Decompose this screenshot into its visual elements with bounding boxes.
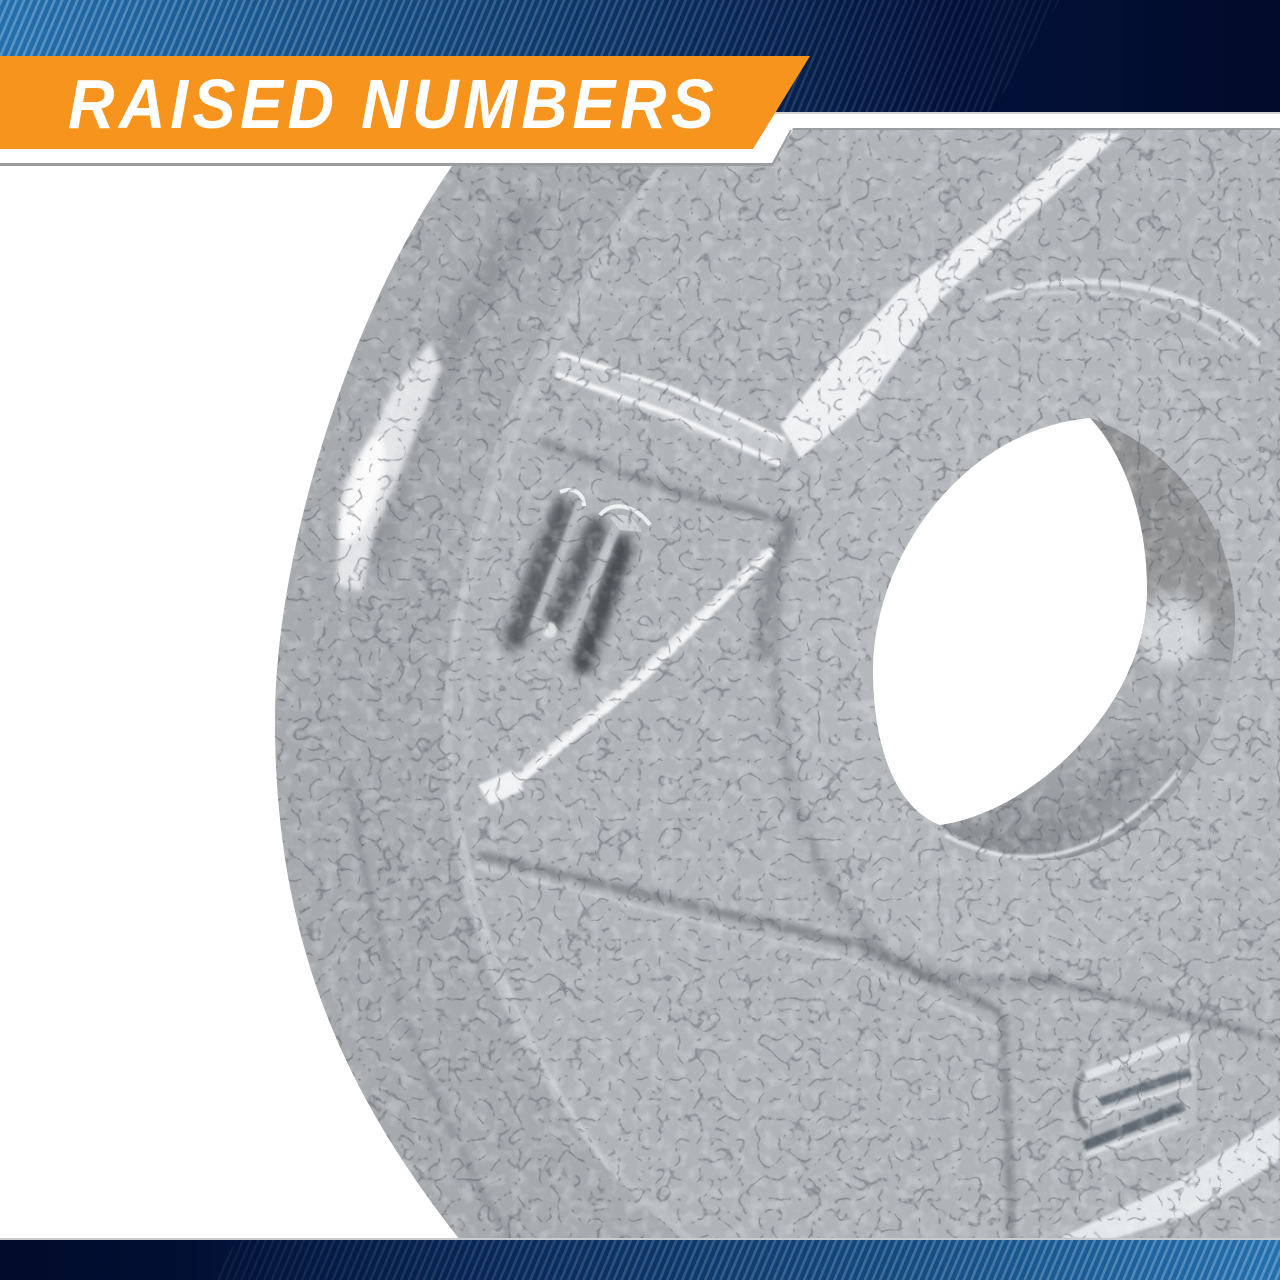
groove one: [514, 508, 563, 640]
white title tab: [0, 114, 1280, 166]
lower dark rib: [478, 855, 1002, 1012]
tab underline: [0, 128, 1280, 166]
dark rib line under panel: [542, 442, 790, 522]
hub top highlight second line: [1030, 292, 1240, 350]
bright top band: [1086, 1036, 1190, 1076]
bright mid line: [1102, 1083, 1192, 1113]
rib bright edge lower: [556, 374, 780, 464]
second land between grooves: [566, 525, 617, 650]
hub top highlight: [985, 282, 1260, 345]
diagonal stripes: [212, 1240, 1280, 1280]
groove three: [582, 545, 624, 664]
highlight digit zero top: [600, 506, 650, 525]
rib bright edge upper: [560, 354, 785, 440]
panel vertical shadow: [761, 525, 790, 660]
inner lip ridge: [447, 170, 690, 1240]
lower vertical rib: [1003, 1012, 1012, 1240]
centre hole: [873, 418, 1147, 825]
lip shadow band: [372, 200, 530, 570]
left rim highlight: [336, 342, 442, 592]
band gradient: [0, 0, 1280, 112]
upper diagonal rib highlight: [780, 133, 1122, 458]
diagonal stripes: [0, 0, 1060, 112]
raised number: 10: [514, 490, 650, 664]
left rim bright patch: [335, 436, 387, 544]
bottom right highlight: [1060, 1115, 1280, 1240]
hub edge shadow: [775, 510, 1060, 982]
weight plate photo: [260, 120, 1280, 1250]
texture: crackle: [260, 120, 1280, 1250]
groove lower: [1084, 1106, 1184, 1146]
groove upper: [1100, 1072, 1190, 1102]
right lower dark rib: [1030, 975, 1280, 1040]
hub shading: [762, 290, 1280, 980]
lower lip groove: [350, 770, 510, 1240]
lower rib light edge: [476, 866, 1000, 1030]
lower diagonal stippled highlight: [512, 552, 770, 786]
outer lip shading: [275, 166, 690, 1240]
orange title banner: [0, 56, 810, 149]
texture: speckle: [260, 120, 1280, 1250]
highlight digit one top: [560, 490, 584, 506]
digit left shadow: [1075, 1072, 1088, 1128]
stipple layer one: [512, 552, 770, 786]
band upper rule: [0, 1238, 1280, 1240]
title: RAISED NUMBERS: [68, 66, 714, 144]
bore lower rim highlight: [945, 770, 1180, 857]
band gradient: [0, 1240, 1280, 1280]
digit lower glint: [543, 622, 557, 638]
digit body: [1077, 1030, 1196, 1170]
top banner band: [0, 0, 1280, 114]
digit zero cap: [610, 515, 642, 532]
bore lower shade: [950, 740, 1150, 841]
land between grooves: [534, 505, 580, 625]
bore wall speckled glint: [1132, 596, 1208, 668]
raised number: 5: [1075, 1030, 1196, 1170]
horizontal rib band: [555, 352, 790, 468]
groove two: [555, 528, 597, 618]
diagonal corner highlight: [478, 770, 524, 805]
lower lip highlight: [462, 830, 610, 1170]
bottom band: [0, 1238, 1280, 1280]
bright lower line: [1086, 1122, 1178, 1155]
stipple layer two: [514, 552, 764, 778]
plate base: [260, 120, 1280, 1250]
band lower rule: [775, 112, 1280, 114]
bore wall: [940, 418, 1235, 860]
